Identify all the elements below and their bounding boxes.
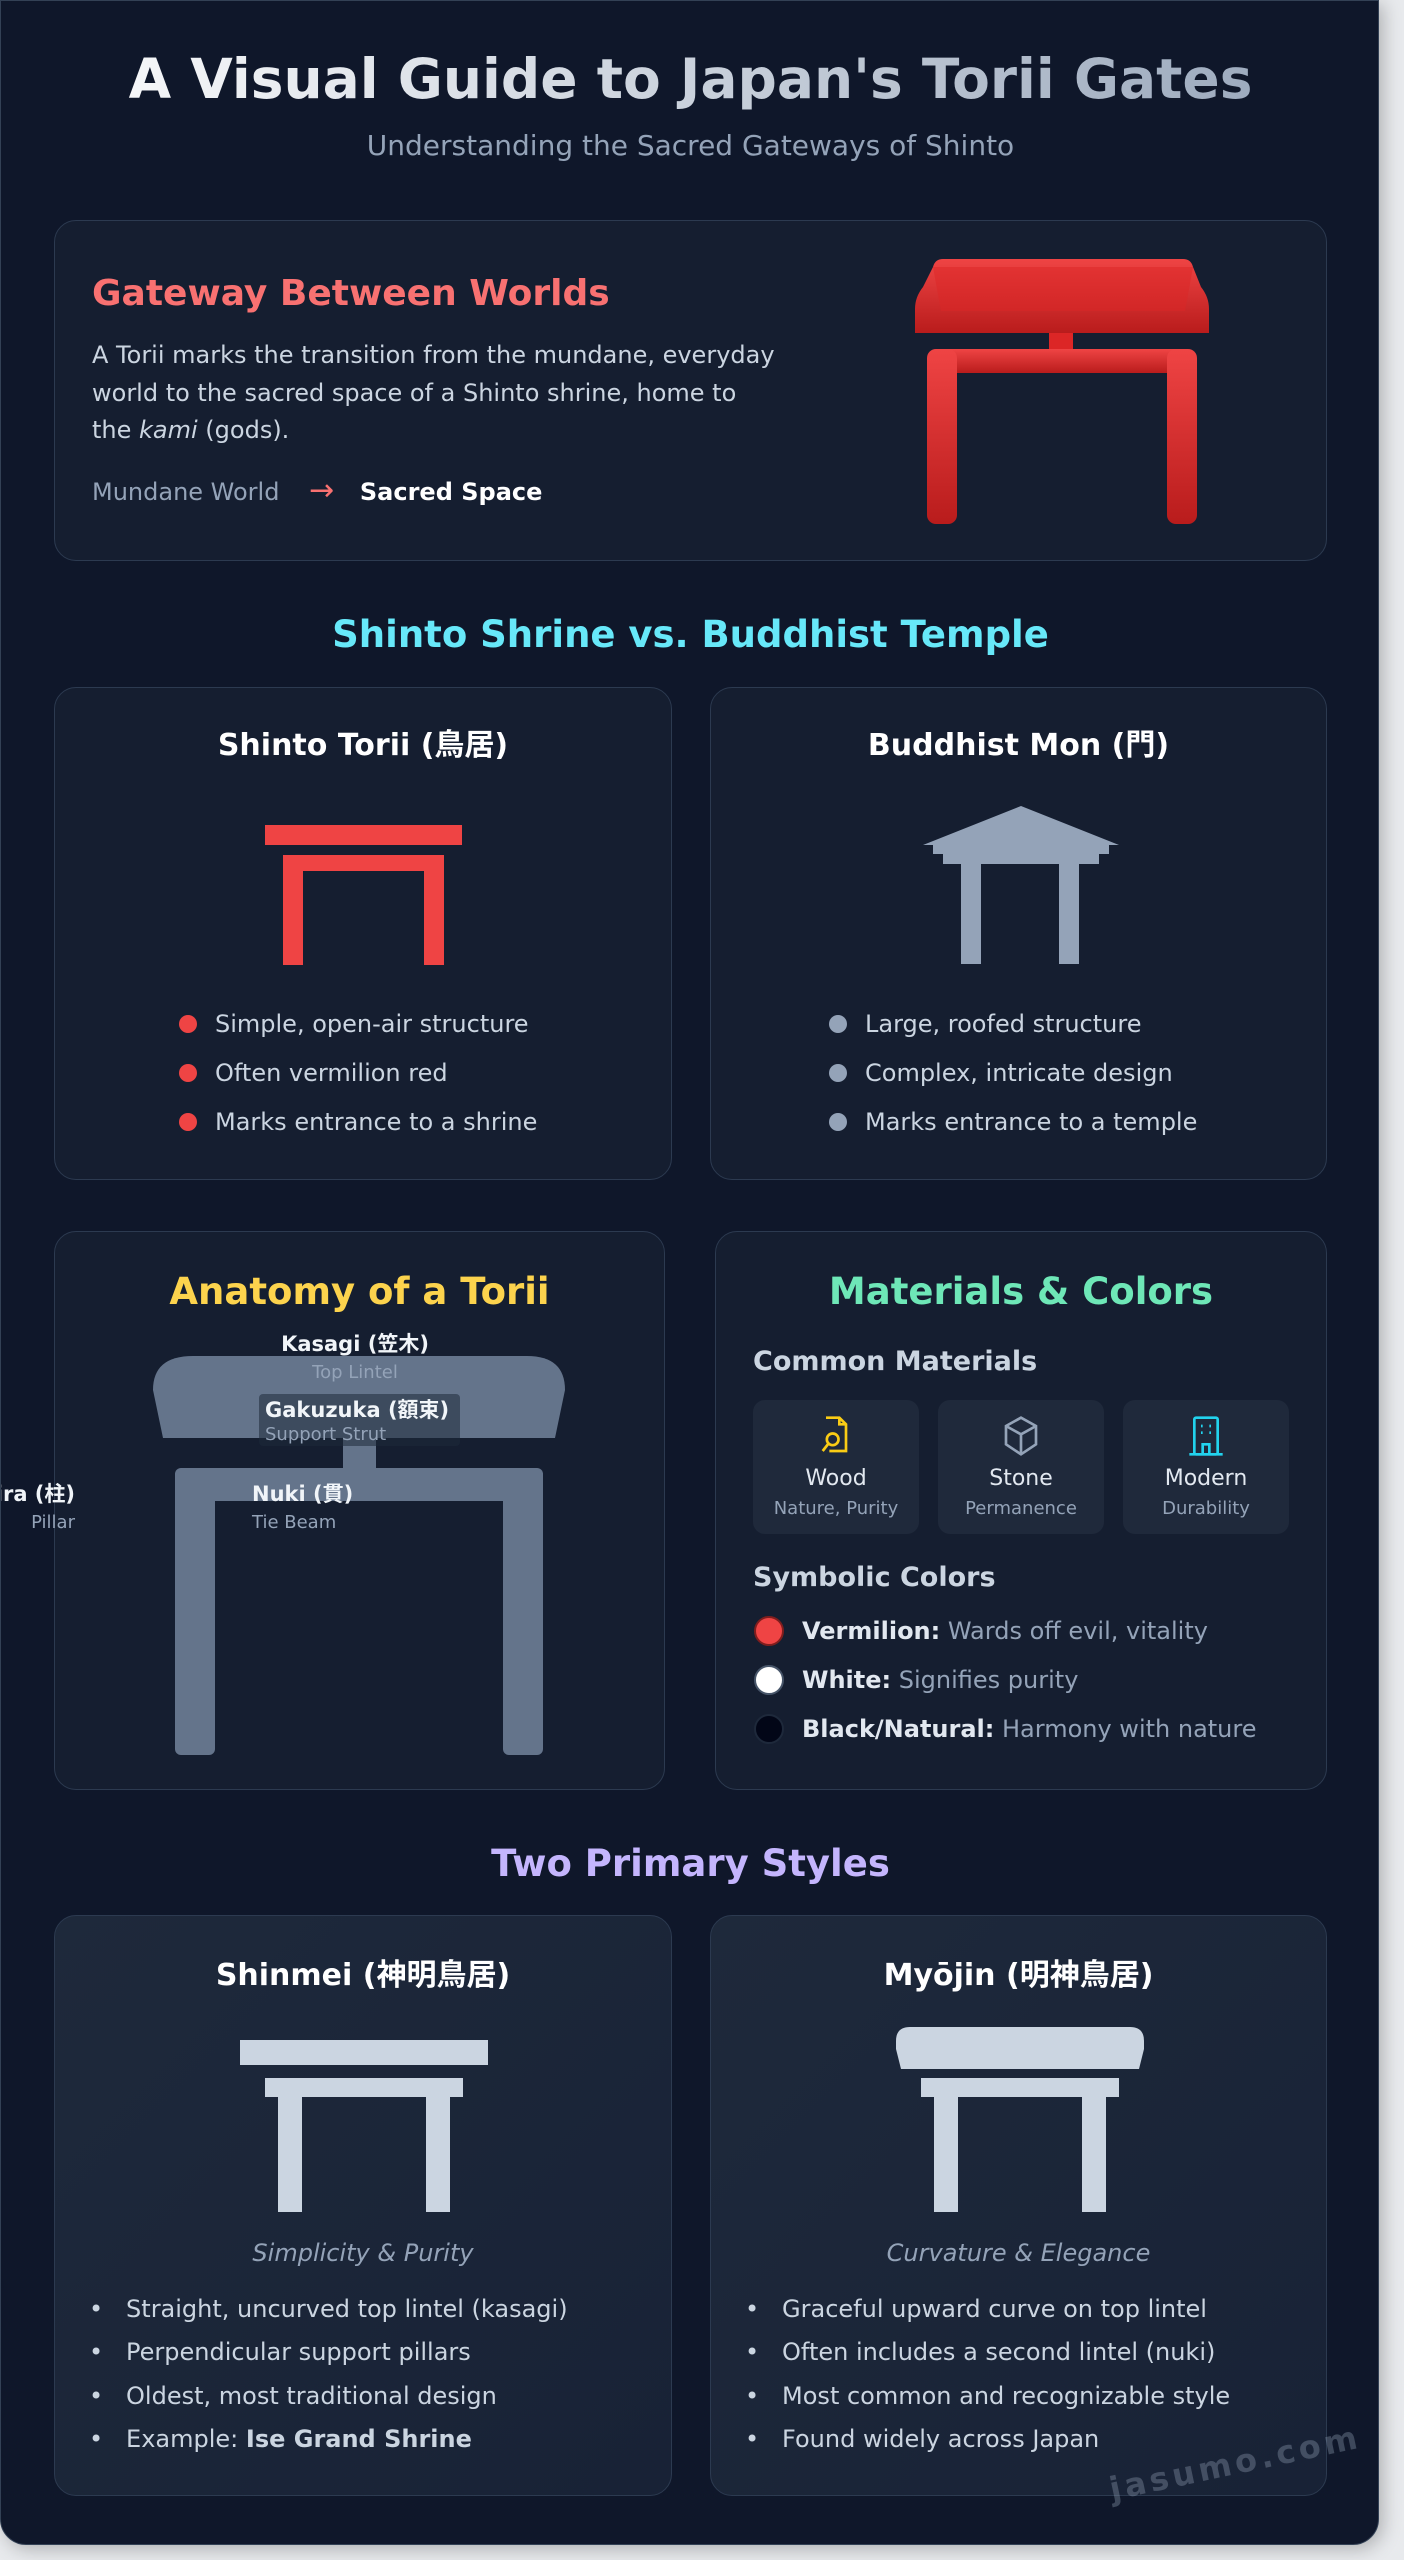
- label: nuki: [252, 1482, 353, 1533]
- panel title: Shinmei (神明鳥居): [216, 1958, 510, 1993]
- icon: temple gate: [923, 806, 1119, 964]
- bullet list: • Most common and recognizable style: [745, 2382, 1230, 2410]
- bullet list: Complex, intricate design: [865, 1059, 1173, 1087]
- bullet list: Simple, open-air structure: [215, 1010, 529, 1038]
- bullet list: Marks entrance to a temple: [865, 1108, 1197, 1136]
- title: A Visual Guide to Japan's Torii Gates: [129, 47, 1252, 111]
- material: modern: [1123, 1400, 1289, 1534]
- bullet list: • Found widely across Japan: [745, 2425, 1099, 2453]
- material cards: [753, 1400, 1289, 1534]
- watermark: jasumo.com: [1106, 2418, 1364, 2508]
- caption: Simplicity & Purity: [252, 2239, 474, 2267]
- heading: materials: Materials & Colors: [829, 1270, 1213, 1313]
- label: kasagi: Top Lintel: [312, 1362, 398, 1383]
- bullet list: Large, roofed structure: [865, 1010, 1141, 1038]
- bullet list: Marks entrance to a shrine: [215, 1108, 537, 1136]
- heading: two primary styles: Two Primary Styles: [491, 1842, 890, 1885]
- icon: myojin torii: [896, 2027, 1144, 2212]
- panel: myojin: [710, 1915, 1327, 2496]
- subheading: common materials: Common Materials: [753, 1346, 1037, 1377]
- panel title: Shinto Torii (鳥居): [218, 728, 508, 763]
- bullet list: [829, 1010, 1197, 1136]
- label: gakuzuka: [259, 1394, 460, 1446]
- bullet list: • Oldest, most traditional design: [89, 2382, 497, 2410]
- label: hashira: Pillar: [31, 1512, 75, 1533]
- bullet list: [179, 1010, 537, 1136]
- subtitle: Understanding the Sacred Gateways of Shinto: [367, 129, 1014, 162]
- label: nuki: Nuki (貫): [252, 1482, 353, 1506]
- material: wood: Nature, Purity: [774, 1498, 898, 1519]
- icon: red torii: [915, 259, 1209, 524]
- panel: shinto torii: [54, 687, 672, 1180]
- text block: description: the kami (gods).: [92, 416, 289, 444]
- panel title: Myōjin (明神鳥居): [884, 1958, 1153, 1993]
- panel: anatomy: [54, 1231, 665, 1790]
- color list: Black/Natural: Harmony with nature: [802, 1715, 1256, 1743]
- material: stone: Permanence: [965, 1498, 1077, 1519]
- bullet list: • Example: Ise Grand Shrine: [89, 2425, 472, 2453]
- label: hashira: [0, 1482, 75, 1533]
- material: stone: [938, 1400, 1104, 1534]
- text block: description: [92, 341, 775, 444]
- heading: anatomy: Anatomy of a Torii: [169, 1270, 550, 1313]
- color list: White: Signifies purity: [802, 1666, 1078, 1694]
- label: kasagi: Kasagi (笠木): [281, 1332, 429, 1356]
- heading: gateway: Gateway Between Worlds: [92, 273, 610, 314]
- material: modern: Durability: [1162, 1498, 1250, 1519]
- bullet list: • Straight, uncurved top lintel (kasagi): [89, 2295, 568, 2323]
- diagram: torii anatomy: [153, 1356, 565, 1755]
- text block: description: world to the sacred space of a Shinto shrine, home to: [92, 378, 736, 406]
- material: wood: Wood: [805, 1466, 867, 1491]
- panel: buddhist mon: [710, 687, 1327, 1180]
- caption: Curvature & Elegance: [887, 2239, 1150, 2267]
- label: gakuzuka: Gakuzuka (額束): [265, 1398, 449, 1422]
- label: gakuzuka: Support Strut: [265, 1424, 386, 1445]
- icon: simple torii: [265, 825, 462, 965]
- label: nuki: Tie Beam: [252, 1512, 336, 1533]
- bullet list: • Perpendicular support pillars: [89, 2338, 471, 2366]
- icon: shinmei torii: [240, 2040, 488, 2212]
- bullet list: [745, 2295, 1230, 2453]
- color list: Vermilion: Wards off evil, vitality: [802, 1617, 1208, 1645]
- material: wood: [753, 1400, 919, 1534]
- bullet list: [89, 2295, 568, 2453]
- bullet list: • Graceful upward curve on top lintel: [745, 2295, 1207, 2323]
- heading: shinto vs buddhist: Shinto Shrine vs. Buddhist Temple: [332, 613, 1049, 656]
- panel: gateway between worlds: [54, 220, 1327, 561]
- bullet list: Often vermilion red: [215, 1059, 448, 1087]
- color list: [754, 1616, 1256, 1744]
- transition row: Mundane World → Sacred Space: [92, 473, 542, 508]
- material: stone: Stone: [989, 1466, 1053, 1491]
- bullet list: • Often includes a second lintel (nuki): [745, 2338, 1215, 2366]
- panel: materials & colors: [715, 1231, 1327, 1790]
- label: kasagi: [281, 1332, 429, 1383]
- panel: shinmei: [54, 1915, 672, 2496]
- material: modern: Modern: [1165, 1466, 1247, 1491]
- panel title: Buddhist Mon (門): [868, 728, 1169, 763]
- text block: description: A Torii marks the transition from the mundane, everyday: [92, 341, 775, 369]
- subheading: symbolic colors: Symbolic Colors: [753, 1562, 996, 1593]
